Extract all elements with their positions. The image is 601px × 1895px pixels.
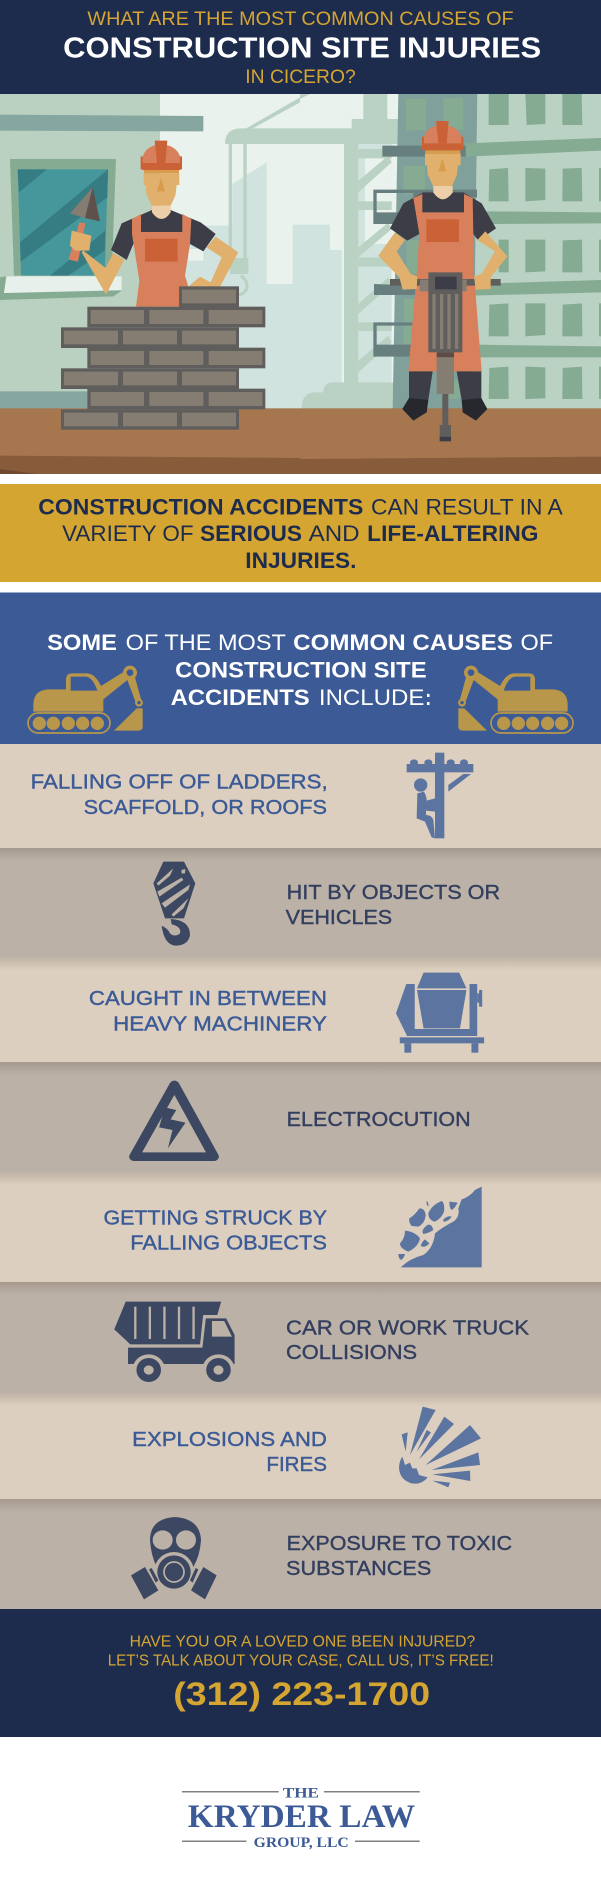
label <box>31 770 328 819</box>
intro heading <box>47 630 553 710</box>
icon: dump truck <box>114 1302 235 1384</box>
statement text: VARIETY OF <box>62 521 194 546</box>
bricklayer worker <box>69 141 238 307</box>
logo: The Kryder Law Group, LLC: THE <box>283 1786 319 1802</box>
row 6: collisions <box>0 1282 601 1393</box>
header banner <box>0 0 601 94</box>
row 1: falling <box>0 744 601 848</box>
brick wall <box>61 286 265 430</box>
label: SUBSTANCES <box>286 1557 431 1580</box>
label: FALLING OFF OF LADDERS, <box>31 770 328 793</box>
call to action text: LET’S TALK ABOUT YOUR CASE, CALL US, IT’S FREE! <box>108 1653 494 1670</box>
label: HEAVY MACHINERY <box>113 1012 327 1035</box>
logo: The Kryder Law Group, LLC <box>182 1786 420 1851</box>
label: EXPOSURE TO TOXIC <box>287 1532 512 1555</box>
row 8: toxic substances <box>0 1499 601 1609</box>
statement text: SERIOUS <box>200 521 302 546</box>
title line: in Cicero: IN CICERO? <box>245 66 356 88</box>
intro heading: OF THE MOST <box>126 630 286 655</box>
intro heading: INCLUDE <box>319 685 424 710</box>
call to action text: HAVE YOU OR A LOVED ONE BEEN INJURED? <box>130 1634 475 1651</box>
icon: crane hook <box>153 862 195 946</box>
intro heading: CONSTRUCTION SITE <box>175 658 427 683</box>
intro heading: OF <box>520 630 553 655</box>
label: COLLISIONS <box>286 1341 417 1364</box>
row 5: falling objects <box>0 1172 601 1282</box>
statement text: INJURIES. <box>245 548 356 573</box>
jackhammer <box>428 272 462 441</box>
label: GETTING STRUCK BY <box>104 1206 327 1229</box>
icon: excavator right <box>458 666 573 733</box>
left half of scene: building, window, bricklayer <box>0 94 300 474</box>
call to action text <box>108 1634 494 1670</box>
label <box>286 881 500 929</box>
row 3: caught in between <box>0 957 601 1062</box>
statement text: CAN RESULT IN A <box>371 495 563 520</box>
intro heading: ACCIDENTS <box>171 685 310 710</box>
label: CAR OR WORK TRUCK <box>286 1316 529 1339</box>
label <box>286 1532 512 1580</box>
label: FIRES <box>266 1453 327 1476</box>
label <box>286 1316 529 1364</box>
intro heading: SOME <box>47 630 117 655</box>
intro heading: COMMON CAUSES <box>293 630 513 655</box>
label: VEHICLES <box>286 906 392 929</box>
label <box>132 1428 327 1476</box>
icon: explosion <box>399 1407 481 1487</box>
icon: excavator left <box>28 666 143 733</box>
label: CAUGHT IN BETWEEN <box>89 987 327 1010</box>
icon: worker climbing utility pole <box>407 753 473 838</box>
statement text: LIFE-ALTERING <box>367 521 538 546</box>
row 4: electrocution <box>0 1062 601 1172</box>
title line: what are the most common causes of: WHAT ARE THE MOST COMMON CAUSES OF <box>87 8 514 30</box>
icon: cement mixer <box>396 973 484 1053</box>
footer call to action <box>0 1609 601 1737</box>
statement text: AND <box>309 521 360 546</box>
row 7: explosions and fires <box>0 1393 601 1499</box>
gold statement banner <box>0 484 601 582</box>
intro heading: : <box>425 685 431 710</box>
icon: gas mask <box>131 1517 217 1599</box>
label <box>89 987 327 1035</box>
logo: The Kryder Law Group, LLC: KRYDER LAW <box>188 1799 415 1835</box>
blue intro panel <box>0 592 601 744</box>
label: ELECTROCUTION <box>287 1108 471 1131</box>
label: SCAFFOLD, OR ROOFS <box>84 796 327 819</box>
phone number: (312) 223-1700 <box>173 1676 430 1712</box>
label: HIT BY OBJECTS OR <box>287 881 500 904</box>
label <box>104 1206 327 1254</box>
statement text: CONSTRUCTION ACCIDENTS <box>38 495 363 520</box>
label: EXPLOSIONS AND <box>132 1428 327 1451</box>
illustration: construction site with two workers <box>0 94 601 474</box>
title line: construction site injuries: CONSTRUCTION SITE INJURIES <box>63 33 541 65</box>
jackhammer worker <box>378 121 507 441</box>
icon: rockslide <box>398 1187 482 1267</box>
label: FALLING OBJECTS <box>130 1231 327 1254</box>
row 2: hit by objects <box>0 848 601 957</box>
logo: The Kryder Law Group, LLC: GROUP, LLC <box>254 1835 349 1851</box>
statement text <box>38 495 563 573</box>
right half of scene: crane tower, building, jackhammer worker <box>300 94 601 474</box>
icon: high voltage warning triangle <box>134 1085 214 1157</box>
